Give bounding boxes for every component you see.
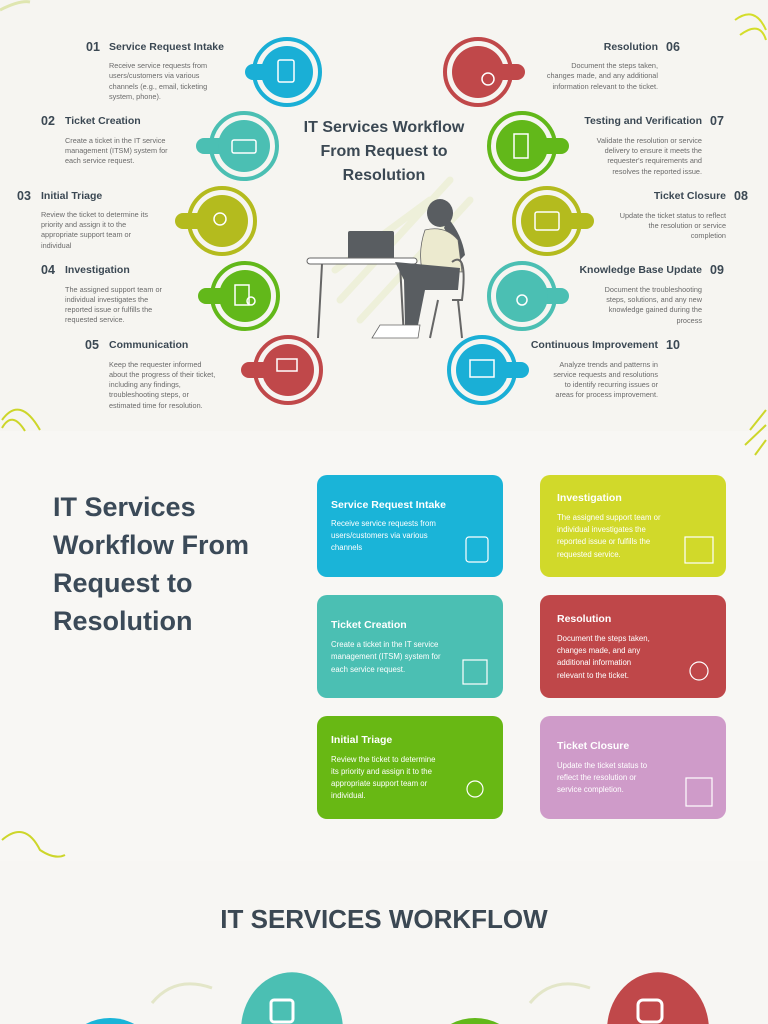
step icon 06 — [445, 39, 525, 105]
step 03 text: 03 — [17, 189, 31, 203]
step icon 08 — [514, 188, 594, 254]
step 09 text — [579, 263, 724, 325]
card: Initial Triage — [317, 716, 503, 819]
bottom circle: green — [451, 1018, 499, 1024]
step icon 07 — [489, 113, 569, 179]
step 04 text: The assigned support team or — [65, 285, 163, 294]
title: top center: Resolution — [343, 167, 425, 184]
step 04 text — [41, 263, 163, 324]
step 09 text: steps, solutions, and any new — [606, 295, 703, 304]
heading: middle section: Resolution — [53, 606, 192, 636]
step 07 text: delivery to ensure it meets the — [605, 146, 702, 155]
step 07 text: 07 — [710, 114, 724, 128]
card: Resolution: changes made, and any — [557, 646, 640, 655]
heading: bottom section: IT SERVICES WORKFLOW — [220, 904, 548, 934]
card: Investigation: Investigation — [557, 492, 622, 504]
heading: middle section: IT Services — [53, 492, 196, 522]
step 05 text: troubleshooting steps, or — [109, 390, 189, 399]
card: Investigation: reported issue or fulfills the — [557, 537, 650, 546]
card: Resolution: relevant to the ticket. — [557, 671, 629, 680]
step 05 text: 05 — [85, 338, 99, 352]
step 04 text: reported issue or fulfills the — [65, 305, 152, 314]
step icon 02 — [196, 113, 277, 179]
step 02 text: management (ITSM) system for — [65, 146, 168, 155]
heading: middle section: Request to — [53, 568, 193, 598]
step 09 text: 09 — [710, 263, 724, 277]
step 01 text — [86, 40, 224, 101]
card: Initial Triage: its priority and assign it to the — [331, 767, 432, 776]
title: top center: From Request to — [320, 143, 448, 160]
step icon 09 — [489, 263, 569, 329]
step 02 text: 02 — [41, 114, 55, 128]
card: Initial Triage: Initial Triage — [331, 734, 392, 746]
step 10 text — [531, 338, 680, 399]
card: Ticket Closure — [540, 716, 726, 819]
step 02 text — [41, 114, 168, 165]
step icon 04 — [198, 263, 278, 329]
card: Investigation: individual investigates the — [557, 525, 646, 534]
bottom circle: blue — [86, 1018, 134, 1024]
step 05 text: about the progress of their ticket, — [109, 370, 215, 379]
card: Ticket Closure: Ticket Closure — [557, 740, 629, 752]
step 08 text: completion — [691, 231, 726, 240]
card: Service Request Intake: Service Request Intake — [331, 499, 446, 511]
step 02 text: Ticket Creation — [65, 115, 141, 127]
step 10 text: Analyze trends and patterns in — [559, 360, 658, 369]
card: Ticket Creation — [317, 595, 503, 698]
step 01 text: 01 — [86, 40, 100, 54]
step 09 text: process — [676, 316, 702, 325]
card: Ticket Creation: each service request. — [331, 665, 405, 674]
step 03 text: Initial Triage — [41, 190, 102, 202]
step 05 text: Keep the requester informed — [109, 360, 201, 369]
step 02 text: Create a ticket in the IT service — [65, 136, 165, 145]
step 04 text: requested service. — [65, 315, 125, 324]
step 09 text: Document the troubleshooting — [605, 285, 702, 294]
step 09 text: knowledge gained during the — [609, 305, 702, 314]
step 06 text: information relevant to the ticket. — [553, 82, 658, 91]
card: Initial Triage: Review the ticket to determine — [331, 755, 435, 764]
step 07 text — [584, 114, 724, 176]
step icon 01 — [245, 39, 320, 105]
step 10 text: to identify recurring issues or — [565, 380, 659, 389]
heading: middle section: Workflow From — [53, 530, 249, 560]
card: Service Request Intake: channels — [331, 543, 362, 552]
step 03 text: priority and assign it to the — [41, 220, 126, 229]
card: Resolution — [540, 595, 726, 698]
step 01 text: users/customers via various — [109, 71, 200, 80]
step icon 03 — [175, 188, 255, 254]
card: Ticket Closure: Update the ticket status to — [557, 761, 648, 770]
step 01 text: system, phone). — [109, 92, 161, 101]
step 01 text: channels (e.g., email, ticketing — [109, 82, 207, 91]
card: Ticket Closure: service completion. — [557, 785, 624, 794]
step 04 text: individual investigates the — [65, 295, 148, 304]
step 05 text: estimated time for resolution. — [109, 401, 203, 410]
step 05 text — [85, 338, 215, 410]
step 09 text: Knowledge Base Update — [579, 264, 702, 276]
step 03 text: appropriate support team or — [41, 230, 132, 239]
step 05 text: including any findings, — [109, 380, 181, 389]
title: top center — [304, 119, 465, 184]
step 08 text: 08 — [734, 189, 748, 203]
card: Initial Triage: individual. — [331, 791, 366, 800]
step 10 text: Continuous Improvement — [531, 339, 659, 351]
step 06 text: changes made, and any additional — [547, 71, 658, 80]
step 04 text: Investigation — [65, 264, 130, 276]
step 10 text: service requests and resolutions — [553, 370, 658, 379]
step 07 text: Validate the resolution or service — [597, 136, 702, 145]
step 07 text: resolves the reported issue. — [612, 167, 702, 176]
card: Service Request Intake — [317, 475, 503, 577]
step 08 text: Update the ticket status to reflect — [620, 211, 726, 220]
step 08 text — [620, 189, 748, 240]
step 05 text: Communication — [109, 339, 188, 351]
card: Initial Triage: appropriate support team or — [331, 779, 428, 788]
step 10 text: areas for process improvement. — [555, 390, 658, 399]
step 03 text: Review the ticket to determine its — [41, 210, 148, 219]
title: top center: IT Services Workflow — [304, 119, 465, 136]
step 06 text: 06 — [666, 40, 680, 54]
card: Investigation: requested service. — [557, 550, 621, 559]
step 04 text: 04 — [41, 263, 55, 277]
step icon 10 — [449, 337, 529, 403]
step 07 text: requester's requirements and — [607, 156, 702, 165]
card: Resolution: Resolution — [557, 613, 611, 625]
card: Ticket Creation: management (ITSM) system for — [331, 652, 441, 661]
step 06 text: Resolution — [604, 41, 658, 53]
card: Ticket Creation: Ticket Creation — [331, 619, 407, 631]
step 03 text: individual — [41, 241, 72, 250]
illustration: woman at desk — [307, 180, 470, 338]
step 08 text: Ticket Closure — [654, 190, 726, 202]
card: Service Request Intake: Receive service requests from — [331, 519, 436, 528]
card: Service Request Intake: users/customers via various — [331, 531, 428, 540]
arrow 2 — [530, 984, 590, 1003]
card: Resolution: Document the steps taken, — [557, 634, 650, 643]
card: Resolution: additional information — [557, 658, 631, 667]
arrow 1 — [152, 984, 212, 1003]
bottom circle: teal — [241, 972, 343, 1024]
step 02 text: each service request. — [65, 156, 134, 165]
heading: middle section — [53, 492, 249, 636]
step 03 text — [17, 189, 148, 250]
step 08 text: the resolution or service — [649, 221, 726, 230]
step 06 text: Document the steps taken, — [571, 61, 658, 70]
step 06 text — [547, 40, 680, 91]
card: Ticket Creation: Create a ticket in the IT service — [331, 640, 438, 649]
card: Ticket Closure: reflect the resolution or — [557, 773, 637, 782]
step 01 text: Receive service requests from — [109, 61, 207, 70]
step 01 text: Service Request Intake — [109, 41, 224, 53]
card: Investigation: The assigned support team or — [557, 513, 661, 522]
step 07 text: Testing and Verification — [584, 115, 702, 127]
bottom circle: red — [607, 972, 709, 1024]
step icon 05 — [241, 337, 321, 403]
step 10 text: 10 — [666, 338, 680, 352]
card: Investigation — [540, 475, 726, 577]
